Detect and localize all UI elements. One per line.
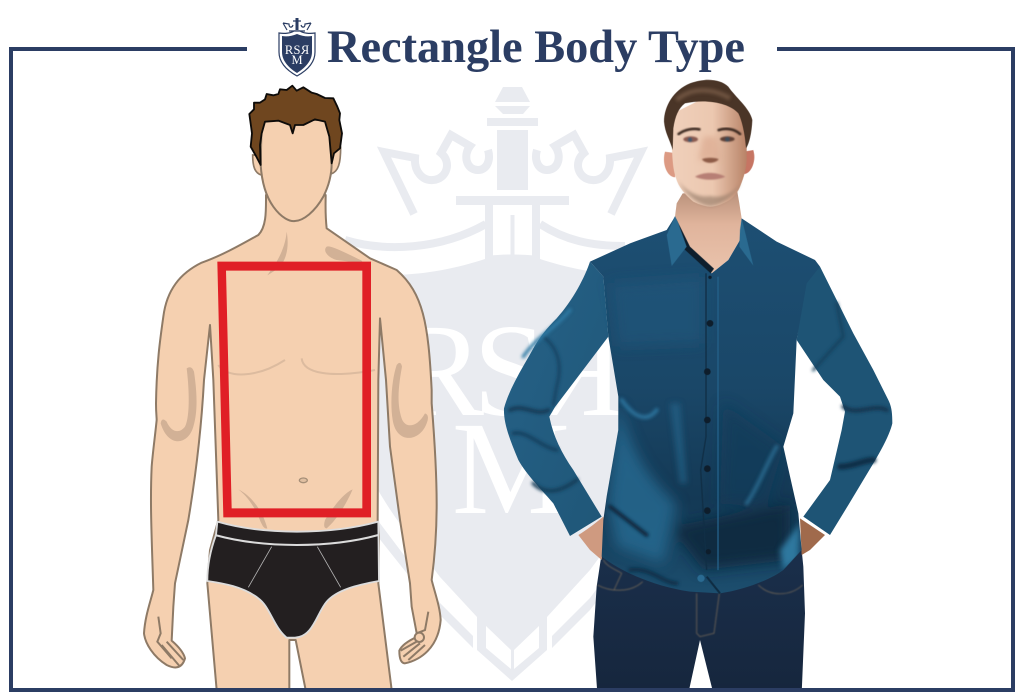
man: collar <box>667 216 753 266</box>
man: jeans stitching <box>597 560 803 637</box>
logo: crown <box>283 18 311 31</box>
man: neck <box>675 192 742 273</box>
man: buttons <box>697 276 713 582</box>
figure: hair <box>249 86 342 165</box>
logo <box>279 18 315 76</box>
man: shirt torso <box>590 217 820 593</box>
watermark: curved shield band <box>345 224 625 247</box>
man: placket <box>701 273 720 593</box>
logo: shield <box>279 31 315 76</box>
logo: inner shield <box>282 34 312 73</box>
figure: briefs <box>207 522 379 638</box>
man: left arm <box>504 262 608 536</box>
logo: monogram: M <box>291 53 303 67</box>
watermark: side chevrons <box>370 510 655 648</box>
logo: monogram: S <box>294 43 301 57</box>
watermark: lower white panels <box>486 626 539 669</box>
man: jeans <box>593 550 805 693</box>
man: face shading <box>678 137 742 206</box>
man: eyes <box>683 136 735 142</box>
watermark: crown finial and sword <box>456 87 569 259</box>
watermark: monogram letters: M <box>452 394 570 542</box>
photo: man in blue shirt <box>504 80 892 693</box>
watermark: monogram letters: S <box>473 296 547 444</box>
figure: navel <box>299 478 307 483</box>
man: ears <box>664 150 754 177</box>
man: left hand <box>578 517 605 560</box>
figure: red rectangle <box>217 262 371 517</box>
illustrated figure <box>144 86 441 690</box>
logo: monogram: R <box>285 43 294 57</box>
logo: monogram <box>285 43 309 67</box>
watermark: monogram letters: R <box>536 296 625 444</box>
man: right arm <box>797 267 892 535</box>
figure: face <box>261 120 332 221</box>
man: shirt folds <box>607 277 800 583</box>
figure: hand details <box>157 612 428 667</box>
figure: chest lines <box>218 358 375 374</box>
logo: monogram: R <box>300 43 309 57</box>
man: right hand <box>800 518 825 555</box>
man: hair highlight <box>677 90 730 100</box>
man: sleeve folds <box>510 303 887 491</box>
figure: body silhouette <box>144 195 441 690</box>
watermark: monogram letters <box>395 296 625 542</box>
man: mouth <box>695 173 725 180</box>
man: nose <box>702 158 719 163</box>
watermark: shield body <box>345 254 680 681</box>
title: Rectangle Body Type <box>327 21 745 73</box>
man: brows <box>679 129 740 134</box>
figure: muscle shading <box>161 232 428 528</box>
watermark: RSM crest <box>345 87 680 681</box>
figure: briefs waistband and seams <box>215 535 378 587</box>
watermark: monogram letters: R <box>395 296 484 444</box>
man: inner collar shadow <box>676 218 714 273</box>
watermark: crown outline <box>384 135 641 214</box>
man: face <box>672 97 747 207</box>
figure: ears <box>253 147 341 175</box>
man: hair <box>664 80 752 150</box>
